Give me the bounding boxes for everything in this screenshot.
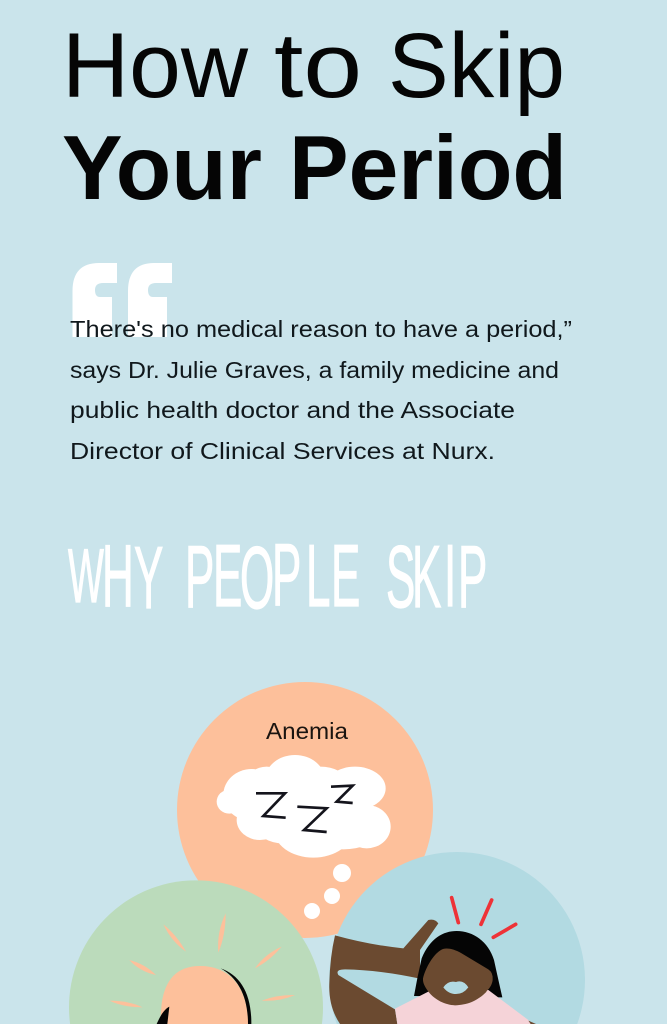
title: [62, 15, 567, 219]
quote text: says Dr. Julie Graves, a family medicine and: [70, 357, 559, 383]
icon: hair: [414, 931, 502, 997]
quote text: Director of Clinical Services at Nurx.: [70, 438, 495, 464]
icon: sleep thought cloud: [217, 755, 391, 858]
icon: thought bubbles: [304, 864, 351, 919]
title: Skip: [388, 15, 565, 117]
icon: pain lines: [452, 898, 516, 937]
icon: face: [423, 949, 493, 1005]
title: to: [274, 15, 362, 117]
icon: raised arm: [329, 920, 438, 1024]
title: Period: [289, 118, 567, 219]
panel: blue circle with headache figure: [329, 852, 585, 1024]
icon: shirt: [395, 990, 533, 1024]
panel: green circle with glowing head: [69, 880, 323, 1024]
icon: head: [160, 966, 248, 1024]
quote text: [70, 316, 572, 464]
title: How: [62, 15, 249, 117]
anemia label: Anemia: [266, 718, 349, 744]
section heading: WHY PEOPLE SKIP: [68, 525, 487, 627]
quote text: There's no medical reason to have a period,”: [70, 316, 572, 342]
quote text: public health doctor and the Associate: [70, 397, 515, 423]
panel: anemia: [177, 682, 433, 938]
decorative quotation mark: [72, 263, 172, 337]
title: Your: [62, 118, 262, 219]
icon: lips: [443, 981, 468, 994]
icon: radiating rays: [109, 913, 295, 1007]
